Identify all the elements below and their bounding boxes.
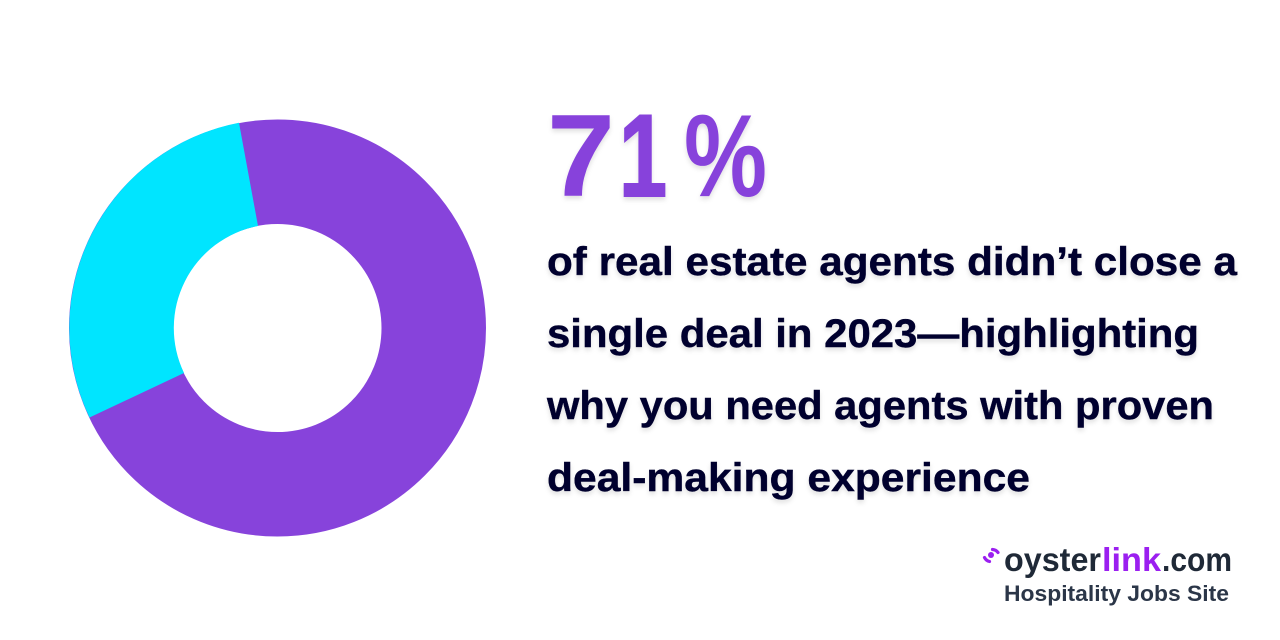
logo wordmark: oyster xyxy=(1004,541,1101,578)
donut ring: 71% purple xyxy=(121,172,434,484)
logo wordmark: link xyxy=(1102,541,1162,578)
description text: of real estate agents didn’t close a xyxy=(547,240,1238,284)
logo tagline: Hospitality Jobs Site xyxy=(1004,581,1229,606)
donut chart xyxy=(69,123,434,484)
description text: deal-making experience xyxy=(547,456,1030,500)
description text: why you need agents with proven xyxy=(546,384,1214,428)
big statistic: % xyxy=(684,90,767,221)
big statistic: 1 xyxy=(619,90,667,221)
description text: single deal in 2023—highlighting xyxy=(547,312,1199,356)
donut segment: 29% cyan xyxy=(69,123,258,418)
big statistic xyxy=(547,90,767,221)
icon: logo signal mark xyxy=(984,550,998,562)
description text xyxy=(546,240,1238,500)
logo: oysterlink xyxy=(984,541,1232,606)
big statistic: 7 xyxy=(547,90,615,221)
logo wordmark xyxy=(1004,541,1232,578)
logo wordmark: .com xyxy=(1162,541,1232,578)
